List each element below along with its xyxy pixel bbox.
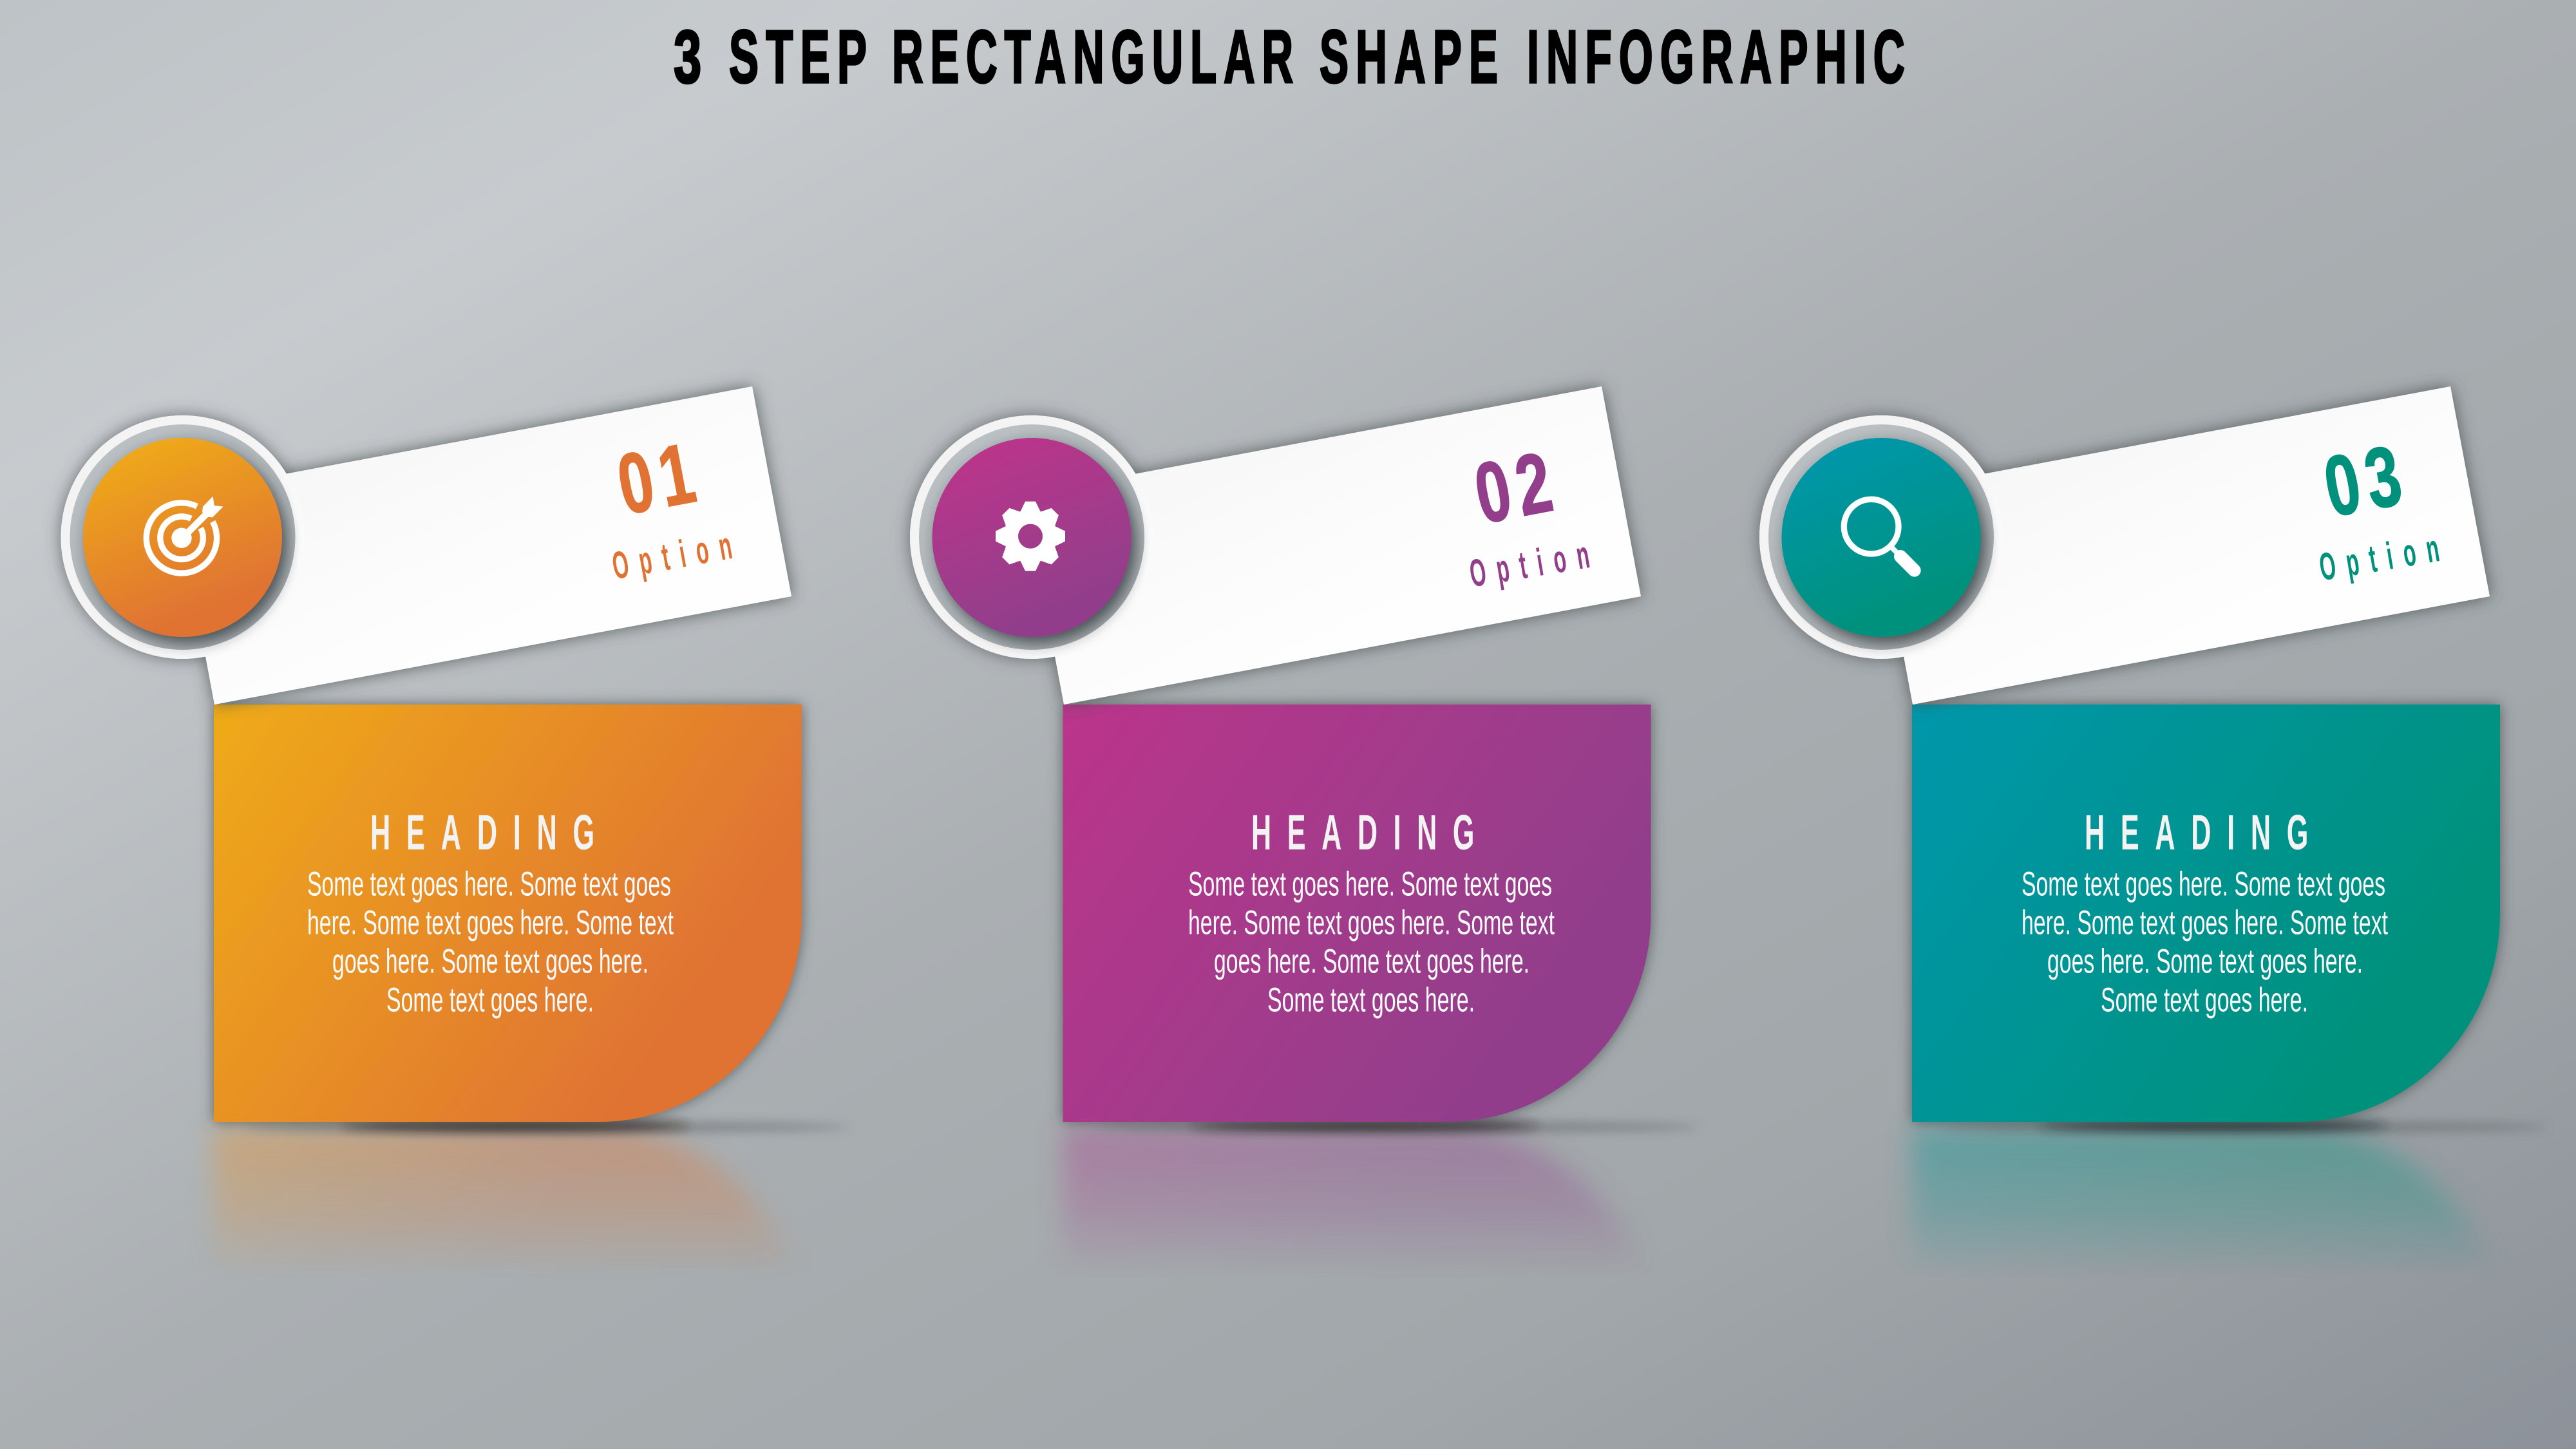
icon: target with arrow: [146, 497, 223, 573]
white strip: step 3: [1873, 386, 2490, 705]
body text: step 1: Some text goes here.: [386, 981, 594, 1019]
body text: step 3: goes here. Some text goes here.: [2047, 943, 2363, 981]
step 3: [1759, 386, 2548, 1288]
body text: step 2: Some text goes here. Some text goes: [1188, 866, 1552, 904]
body text: step 1: here. Some text goes here. Some text: [307, 904, 674, 942]
heading: step 1: HEADING: [370, 805, 611, 860]
card: step 3: [1912, 705, 2500, 1122]
reflection: step 3: [1912, 1130, 2494, 1288]
floor shadow: step 2: [1094, 1121, 1699, 1132]
body text: step 2: Some text goes here.: [1267, 981, 1475, 1019]
step 2: [910, 386, 1699, 1288]
badge: step 3: [1759, 415, 2003, 659]
body text: step 1: [307, 866, 674, 1019]
badge shadow: step 3: [1759, 415, 2003, 659]
white strip: step 2: [1025, 386, 1641, 705]
label: Option 3: Option: [2316, 525, 2453, 589]
white strip: step 1: [175, 386, 791, 705]
title: RECTANGULAR: [892, 15, 1300, 99]
title: SHAPE: [1320, 15, 1505, 99]
body text: step 1: goes here. Some text goes here.: [332, 943, 649, 981]
title: INFOGRAPHIC: [1527, 15, 1912, 99]
badge shadow: step 1: [61, 415, 304, 659]
body text: step 3: Some text goes here.: [2101, 981, 2308, 1019]
icon: gear: [996, 502, 1065, 571]
title: STEP: [729, 15, 873, 99]
reflection: step 1: [201, 1122, 779, 1262]
number: 02: 02: [1468, 433, 1566, 542]
badge: step 1: [61, 415, 304, 659]
icon: magnifying glass: [1844, 499, 1915, 571]
reflection: step 2: [1052, 1122, 1625, 1258]
number: 03: 03: [2317, 426, 2416, 535]
title: 3: [674, 15, 710, 99]
body text: step 2: goes here. Some text goes here.: [1214, 943, 1530, 981]
floor shadow: step 3: [1943, 1121, 2548, 1132]
badge shadow: step 2: [910, 415, 1153, 659]
number: 01: 01: [611, 424, 709, 533]
body text: step 1: Some text goes here. Some text goes: [307, 866, 671, 904]
step 1: [61, 386, 850, 1288]
heading: step 3: HEADING: [2085, 805, 2324, 860]
body text: step 2: [1188, 866, 1555, 1019]
floor shadow: step 1: [245, 1121, 850, 1132]
label: Option 2: Option: [1466, 531, 1603, 595]
card: step 1: [214, 705, 802, 1122]
label: Option 1: Option: [609, 522, 746, 587]
body text: step 3: Some text goes here. Some text goes: [2022, 866, 2385, 904]
badge: step 2: [910, 415, 1153, 659]
body text: step 2: here. Some text goes here. Some text: [1188, 904, 1555, 942]
heading: step 2: HEADING: [1251, 805, 1490, 860]
card: step 2: [1063, 705, 1651, 1122]
body text: step 3: [2022, 866, 2388, 1019]
